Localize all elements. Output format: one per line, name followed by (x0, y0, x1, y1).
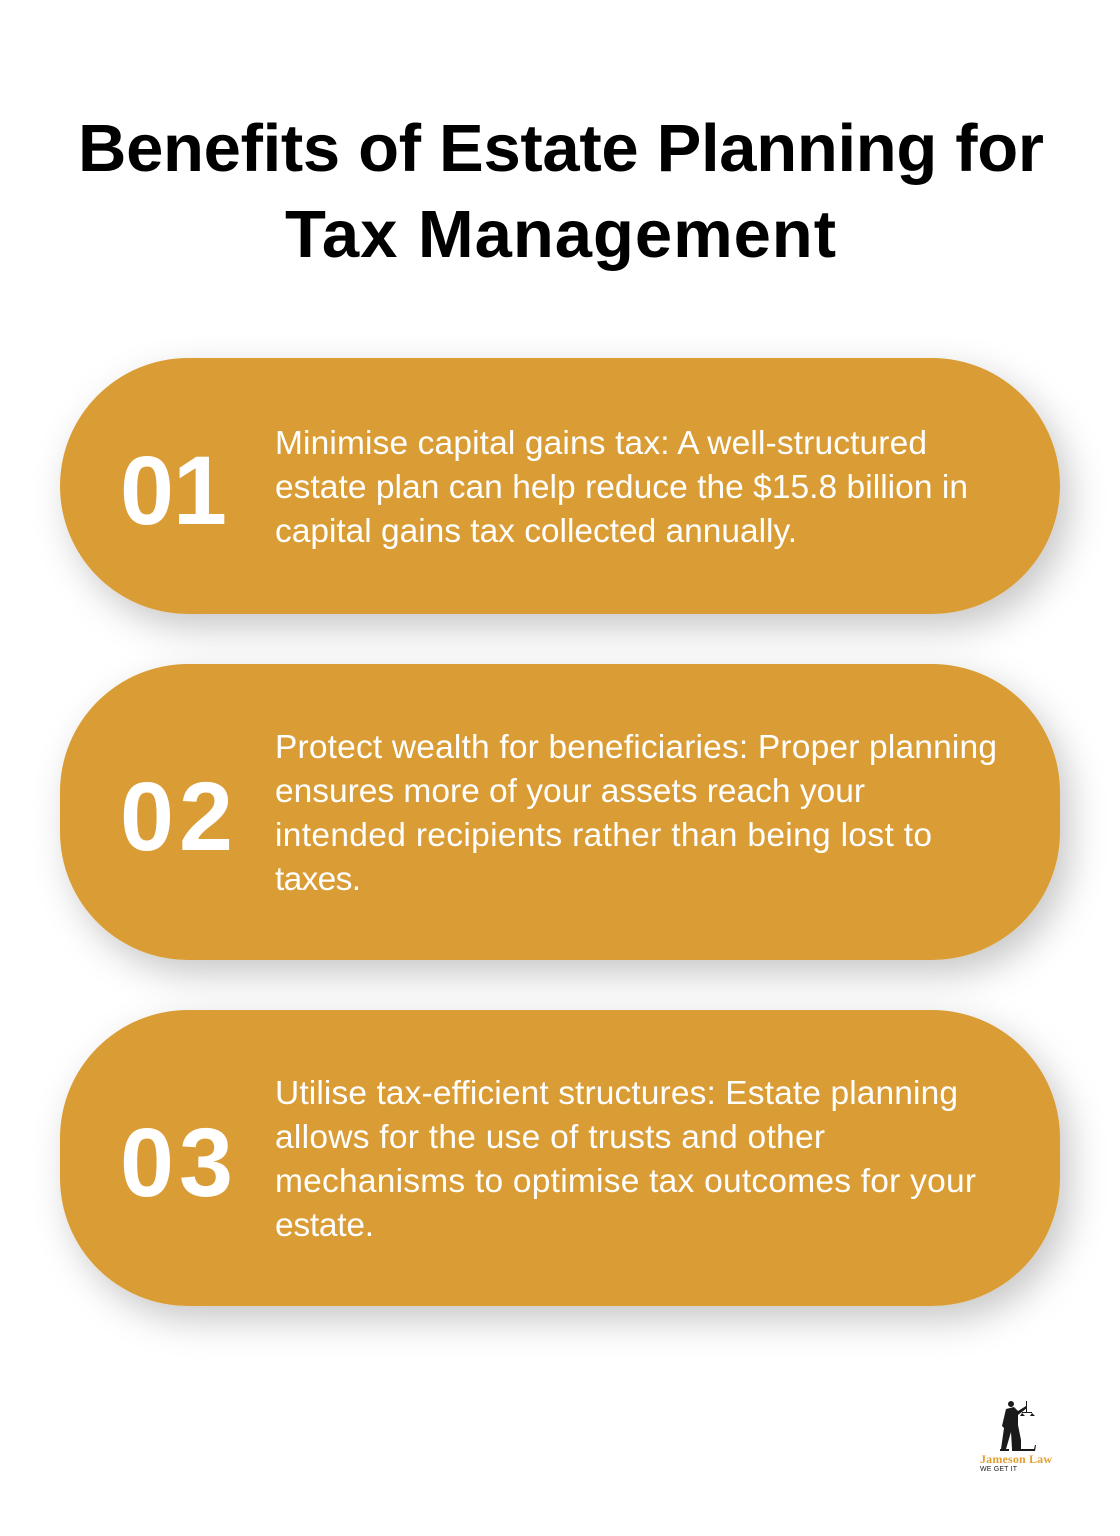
text: protect wealth (275, 729, 997, 898)
card background 03 (60, 1010, 1060, 1306)
text: minimise capital gains tax: estate plan can help reduce the $15.8 billion in (275, 469, 968, 506)
text: tax-efficient structures: Utilise tax-efficient structures: Estate planning (275, 1075, 958, 1112)
card background 02 (60, 664, 1060, 960)
text: minimise capital gains tax: capital gains tax collected annually. (275, 513, 797, 550)
text: minimise capital gains tax (275, 425, 968, 550)
number 01: 01 (120, 436, 227, 545)
panel: benefit 03 (60, 1010, 1060, 1306)
text: protect wealth: Protect wealth for beneficiaries: Proper planning (275, 729, 997, 766)
text: tax-efficient structures: estate. (275, 1207, 374, 1244)
panel: benefit 01 (60, 358, 1060, 614)
icon: lady justice (1000, 1401, 1036, 1451)
text: tax-efficient structures: mechanisms to optimise tax outcomes for your (275, 1163, 976, 1200)
logo: Jameson Law (980, 1401, 1052, 1473)
card background 01 (60, 358, 1060, 614)
text: protect wealth: intended recipients rather than being lost to (275, 817, 932, 854)
number 02: 02 (120, 762, 233, 871)
title: Tax Management (285, 197, 836, 272)
title (78, 111, 1044, 272)
logo wordmark: Jameson Law (980, 1452, 1052, 1466)
panel: benefit 02 (60, 664, 1060, 960)
number 03: 03 (120, 1108, 233, 1217)
text: tax-efficient structures (275, 1075, 976, 1244)
text: protect wealth: ensures more of your assets reach your (275, 773, 865, 810)
title: Benefits of Estate Planning for (78, 111, 1044, 186)
text: protect wealth: taxes. (275, 861, 361, 898)
text: tax-efficient structures: allows for the use of trusts and other (275, 1119, 825, 1156)
logo tagline: WE GET IT (980, 1466, 1018, 1473)
text: minimise capital gains tax: Minimise capital gains tax: A well-structured (275, 425, 927, 462)
